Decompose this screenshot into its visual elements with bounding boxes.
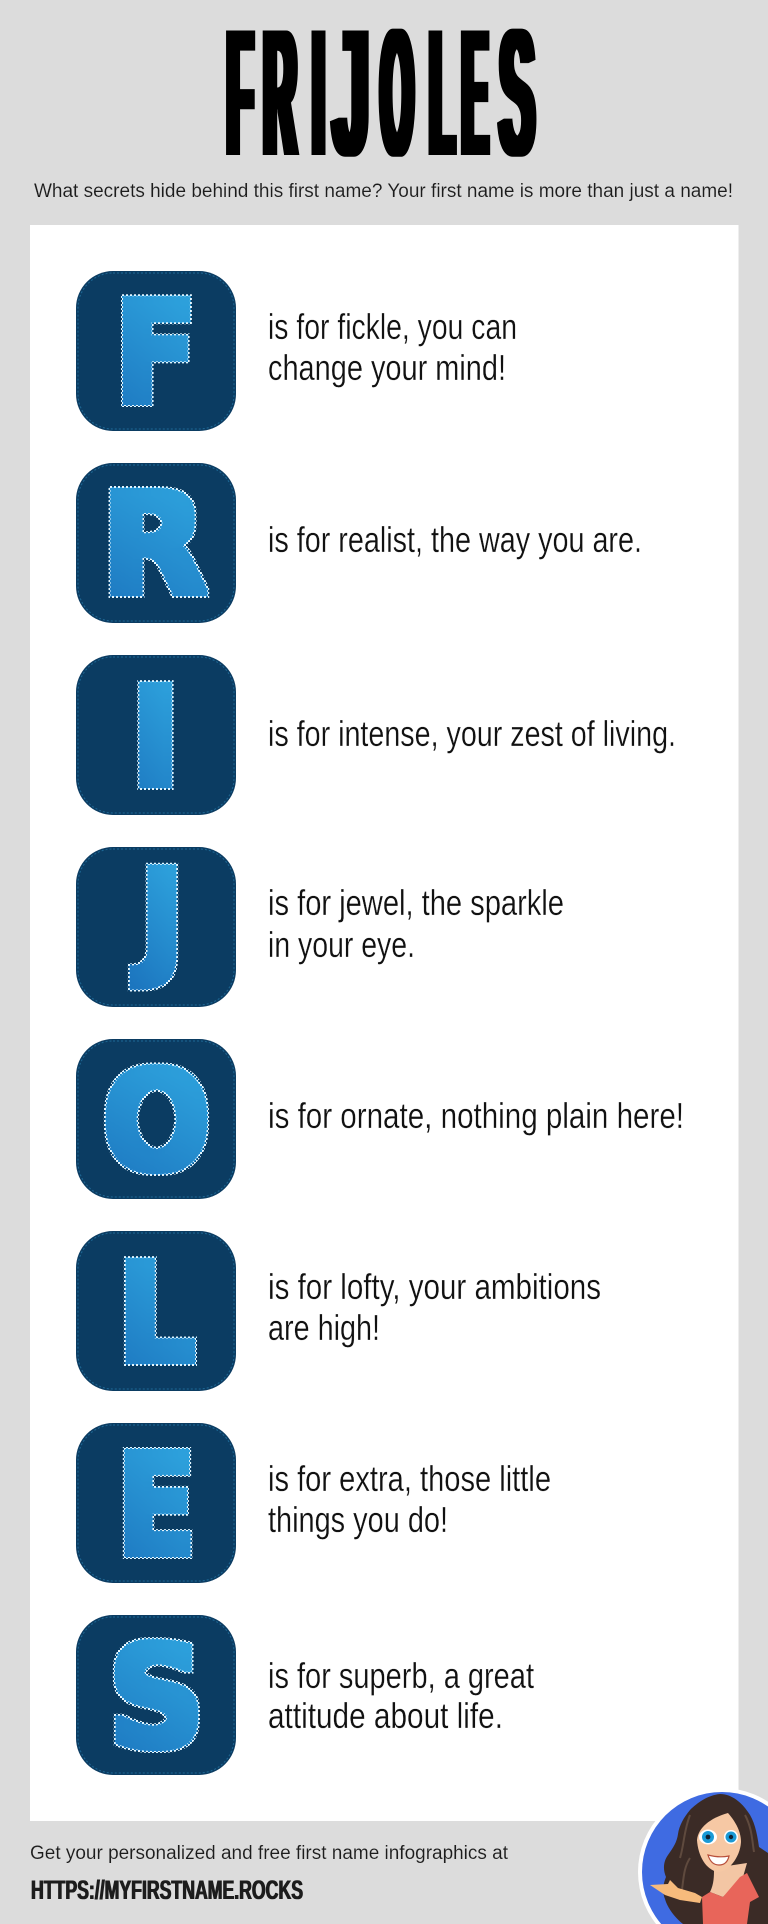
- footer text: Get your personalized and free first name infographics at: [30, 1843, 509, 1864]
- text: F: [268, 306, 517, 388]
- row O: [76, 1039, 684, 1202]
- hair: [663, 1794, 768, 1924]
- eyes: [699, 1830, 717, 1844]
- arm and hand: [650, 1880, 702, 1903]
- text: L: is for lofty, your ambitions: [268, 1266, 601, 1307]
- icon: letter S: S: [108, 1617, 205, 1780]
- icon: letter J: J: [133, 843, 184, 992]
- text: L: are high!: [268, 1307, 380, 1348]
- icon: letter R: R: [101, 463, 207, 626]
- text: E: is for extra, those little: [268, 1458, 551, 1499]
- face: [697, 1813, 741, 1872]
- title: [227, 0, 535, 194]
- text: I: is for intense, your zest of living.: [268, 713, 676, 754]
- icon: letter E: [76, 1423, 236, 1588]
- icon: letter F: F: [115, 271, 197, 435]
- icon: letter R: [76, 463, 236, 626]
- text: S: [268, 1655, 534, 1736]
- smile: [708, 1855, 729, 1865]
- row E: [76, 1423, 551, 1588]
- icon: letter E: E: [117, 1425, 196, 1588]
- text: J: in your eye.: [268, 924, 415, 965]
- subtitle: What secrets hide behind this first name? Your first name is more than just a name!: [34, 181, 733, 202]
- text: F: is for fickle, you can: [268, 306, 517, 347]
- icon: letter I: I: [129, 657, 182, 818]
- text: S: is for superb, a great: [268, 1655, 534, 1696]
- row R: [76, 463, 642, 626]
- panel: letters: [30, 225, 738, 1821]
- icon: letter O: [76, 1039, 236, 1202]
- text: E: [268, 1458, 551, 1540]
- row I: [76, 655, 676, 818]
- shirt: [702, 1873, 759, 1924]
- icon: letter O: O: [103, 1042, 210, 1202]
- icon: letter S: [76, 1615, 236, 1780]
- footer url: HTTPS://MYFIRSTNAME.ROCKS: [31, 1875, 303, 1905]
- text: J: [268, 882, 564, 965]
- icon: letter L: [76, 1231, 236, 1394]
- text: F: change your mind!: [268, 347, 506, 388]
- text: E: things you do!: [268, 1499, 448, 1540]
- row L: [76, 1231, 601, 1394]
- icon: letter L: L: [118, 1234, 195, 1394]
- text: S: attitude about life.: [268, 1695, 503, 1736]
- icon: letter J: [76, 843, 236, 1007]
- row J: [76, 843, 564, 1007]
- text: J: is for jewel, the sparkle: [268, 882, 564, 923]
- row S: [76, 1615, 534, 1780]
- icon: letter I: [76, 655, 236, 818]
- icon: letter F: [76, 271, 236, 435]
- text: L: [268, 1266, 601, 1348]
- avatar: [638, 1788, 768, 1924]
- row F: [76, 271, 517, 435]
- text: O: is for ornate, nothing plain here!: [268, 1095, 684, 1136]
- neck and chest: [710, 1863, 747, 1897]
- text: R: is for realist, the way you are.: [268, 519, 642, 560]
